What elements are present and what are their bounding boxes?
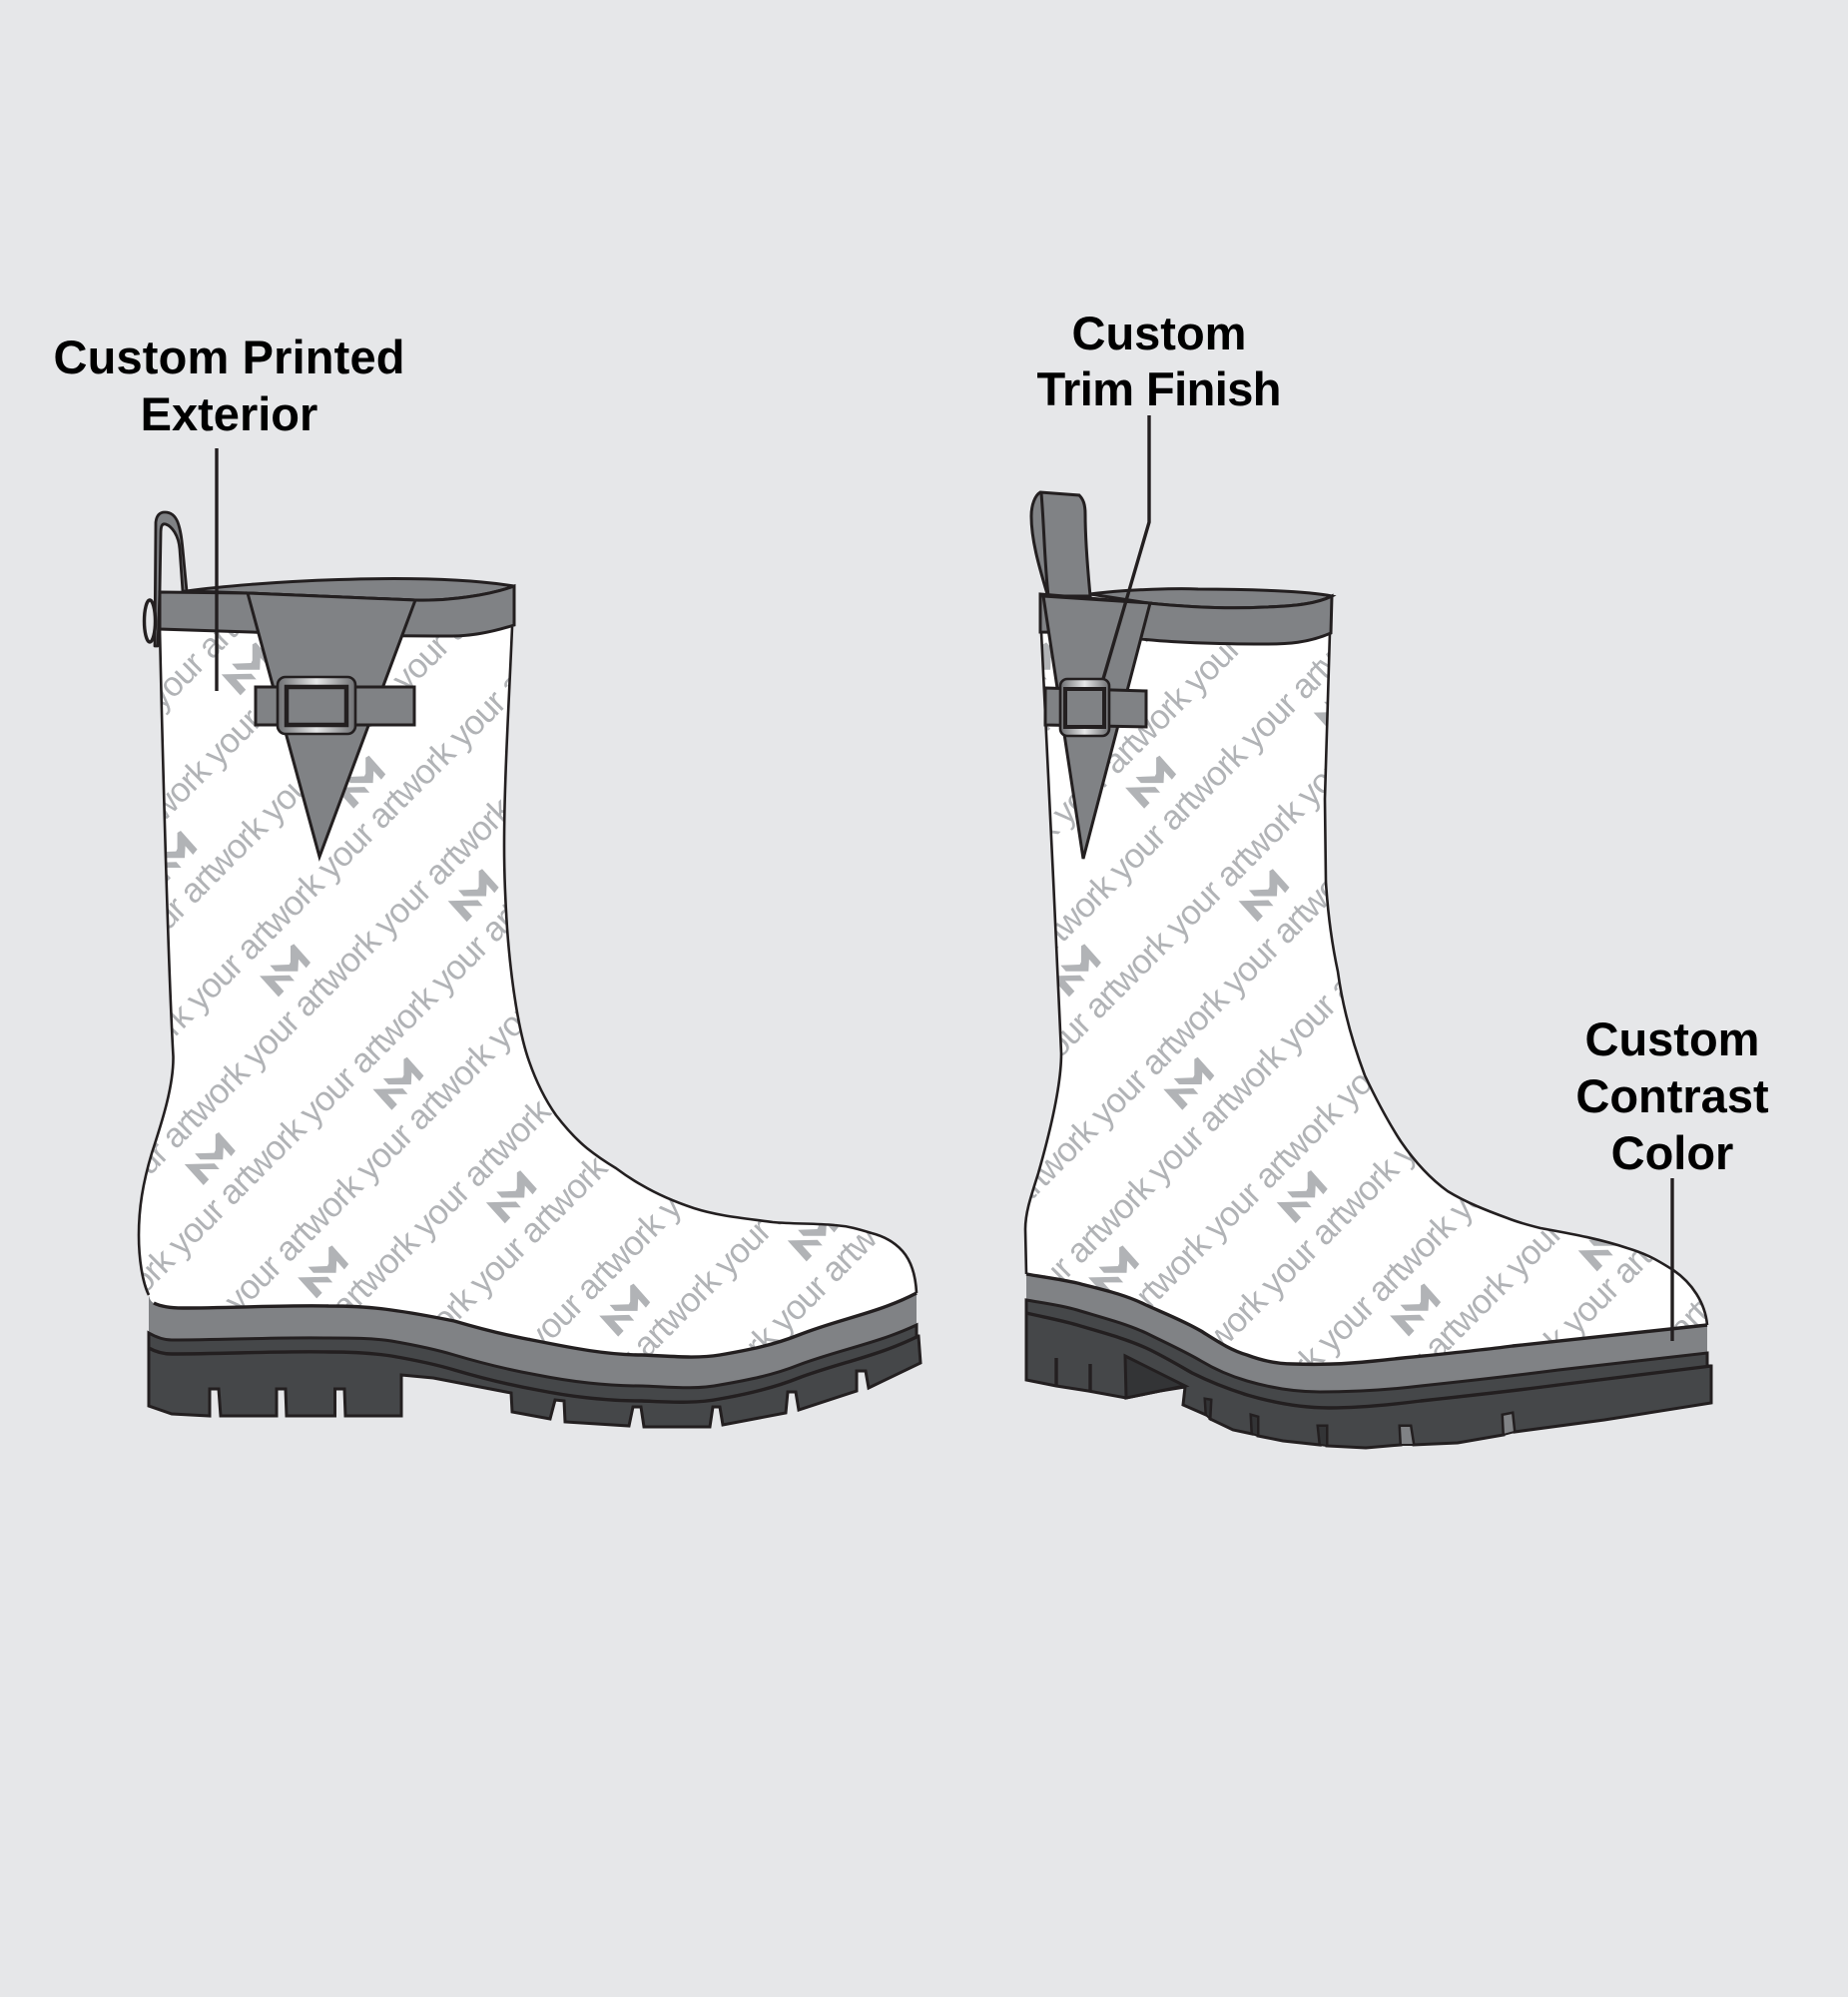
right boot printed pattern: your artwork your artwork your artwork your artwork your artwork your artwork your artwork bbox=[651, 285, 1592, 1226]
right boot upper bbox=[1025, 632, 1707, 1374]
left boot bbox=[138, 511, 923, 1428]
left boot printed pattern: your artwork your artwork your artwork your artwork your artwork your artwork your artwork bbox=[143, 565, 1085, 1508]
right boot printed pattern: your artwork your artwork your artwork your artwork your artwork your artwork your artwork bbox=[707, 340, 1649, 1283]
left boot printed pattern: your artwork your artwork your artwork your artwork your artwork your artwork your artwork bbox=[199, 622, 1141, 1565]
callout: custom contrast color: Custom bbox=[1585, 1012, 1759, 1065]
right boot printed pattern: your artwork your artwork your artwork your artwork your artwork your artwork your artwork bbox=[764, 397, 1706, 1340]
right boot printed pattern: your artwork your artwork your artwork your artwork your artwork your artwork your artwork bbox=[933, 567, 1848, 1510]
left boot printed pattern: your artwork your artwork your artwork your artwork your artwork your artwork your artwork bbox=[0, 395, 915, 1338]
left boot sole seam bbox=[149, 1336, 919, 1402]
right boot heel grooves bbox=[1056, 1358, 1090, 1391]
left boot printed pattern: your artwork your artwork your artwork your artwork your artwork your artwork your artwork bbox=[29, 452, 971, 1395]
leader line bbox=[1670, 1178, 1674, 1341]
callout: custom contrast color: Contrast bbox=[1575, 1069, 1769, 1122]
left boot outsole with lugs bbox=[149, 1325, 921, 1427]
right boot pull loop bbox=[1031, 492, 1090, 596]
right boot strap bbox=[1045, 688, 1146, 727]
right boot collar inside bbox=[1090, 589, 1332, 608]
left boot printed pattern: your artwork your artwork your artwork your artwork your artwork your artwork your artwork bbox=[86, 509, 1028, 1451]
right boot outline bbox=[1025, 632, 1707, 1325]
right boot printed pattern: your artwork your artwork your artwork your artwork your artwork your artwork your artwork bbox=[821, 454, 1763, 1397]
right boot printed pattern: your artwork your artwork your artwork your artwork your artwork your artwork your artwork bbox=[537, 171, 1480, 1113]
right boot printed pattern: your artwork your artwork your artwork your artwork your artwork your artwork your artwork bbox=[594, 228, 1537, 1170]
callout: custom trim finish: Trim Finish bbox=[1036, 362, 1282, 415]
left boot printed pattern: your artwork your artwork your artwork your artwork your artwork your artwork your artwork bbox=[369, 792, 1311, 1734]
left boot contrast midsole bbox=[149, 1293, 917, 1394]
callout: custom printed exterior: Custom Printed bbox=[54, 331, 405, 383]
left boot collar band bbox=[160, 586, 514, 636]
right boot sole seam bbox=[1026, 1313, 1711, 1408]
left boot buckle bbox=[278, 677, 355, 734]
left boot outline bbox=[139, 627, 917, 1295]
callout: custom trim finish: Custom bbox=[1072, 307, 1246, 359]
left boot upper bbox=[139, 627, 917, 1365]
right boot printed pattern bbox=[1032, 641, 1705, 1363]
callout: custom trim finish bbox=[1036, 307, 1282, 679]
left boot printed pattern: your artwork your artwork your artwork your artwork your artwork your artwork your artwork bbox=[312, 736, 1255, 1678]
left boot printed pattern: your artwork your artwork your artwork your artwork your artwork your artwork your artwork bbox=[482, 906, 1425, 1848]
left boot button bbox=[144, 600, 156, 642]
callout: custom printed exterior: Exterior bbox=[141, 387, 317, 440]
left boot printed pattern: your artwork your artwork your artwork your artwork your artwork your artwork your artwork bbox=[256, 679, 1198, 1622]
leader line bbox=[215, 448, 219, 691]
right boot buckle bbox=[1060, 679, 1109, 736]
callout: custom printed exterior bbox=[54, 331, 405, 691]
right boot contrast midsole bbox=[1026, 1274, 1707, 1400]
right boot trim triangle bbox=[1043, 596, 1150, 859]
callout: custom contrast color: Color bbox=[1611, 1126, 1733, 1179]
left boot printed pattern: your artwork your artwork your artwork your artwork your artwork your artwork your artwork bbox=[425, 849, 1368, 1791]
infographic canvas bbox=[55, 317, 1769, 1450]
callout: custom contrast color bbox=[1575, 1012, 1769, 1341]
leader line bbox=[1103, 415, 1149, 679]
right boot bbox=[1024, 491, 1713, 1450]
right boot heel arch bbox=[1125, 1356, 1185, 1398]
left boot printed pattern bbox=[144, 632, 915, 1354]
right boot lug notches bbox=[1205, 1399, 1515, 1446]
right boot printed pattern: your artwork your artwork your artwork your artwork your artwork your artwork your artwork bbox=[878, 510, 1819, 1453]
left boot collar inside bbox=[187, 579, 514, 600]
left boot strap bbox=[256, 687, 414, 725]
right boot outsole with lugs bbox=[1026, 1300, 1711, 1448]
right boot collar band bbox=[1040, 594, 1332, 644]
left boot trim triangle bbox=[248, 593, 415, 857]
left boot pull loop bbox=[144, 512, 187, 646]
